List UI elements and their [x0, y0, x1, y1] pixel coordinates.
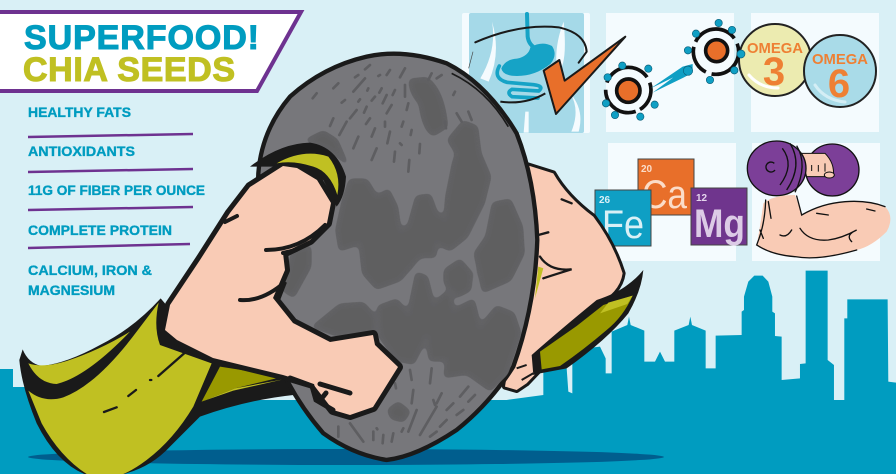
icon: omega 3 bubble: OMEGA — [747, 40, 803, 57]
seed speckles — [313, 65, 475, 443]
panel: antioxidants — [602, 13, 745, 132]
icon: iron tile: Fe — [602, 203, 644, 247]
title banner: SUPERFOOD! — [24, 19, 259, 57]
cape: left — [19, 298, 293, 474]
city skyline — [0, 271, 896, 474]
icon: magnesium tile: Mg — [694, 202, 745, 246]
panel: omega fatty acids — [739, 13, 879, 132]
icon: calcium tile: 20 — [641, 164, 653, 175]
glove band — [277, 154, 338, 195]
benefits list — [28, 105, 205, 298]
icon: calcium tile — [638, 159, 694, 217]
benefits list: HEALTHY FATS — [28, 105, 131, 120]
icon: flexed arm with dumbbell — [747, 141, 890, 258]
icon: iron tile — [595, 190, 651, 247]
icon: omega 6 bubble: OMEGA — [812, 51, 868, 68]
icon: magnesium tile: 12 — [696, 193, 708, 204]
icon: magnesium tile — [691, 188, 747, 246]
icon: omega 6 bubble: 6 — [828, 62, 850, 106]
title banner: CHIA SEEDS — [23, 51, 235, 89]
icon: stomach and intestines — [497, 14, 555, 98]
left arm and fist — [165, 143, 398, 415]
fingers — [290, 378, 350, 410]
benefits list: COMPLETE PROTEIN — [28, 223, 172, 238]
icon: orange check mark — [469, 27, 625, 114]
icon: omega 3 bubble — [739, 24, 811, 96]
icon: iron tile: 26 — [599, 195, 611, 206]
cape: right — [532, 270, 643, 375]
chia seed boulder — [258, 54, 537, 460]
icon: omega 3 bubble: 3 — [763, 50, 785, 94]
panel: minerals — [595, 143, 747, 261]
icon: omega 6 bubble — [804, 35, 876, 107]
glove cuff — [250, 143, 346, 207]
right arm and hand — [505, 165, 623, 390]
panel: digestion — [462, 13, 625, 133]
benefits list: 11G OF FIBER PER OUNCE — [28, 183, 205, 198]
benefits list: ANTIOXIDANTS — [28, 144, 135, 159]
title banner — [0, 12, 301, 91]
panel: strength — [747, 141, 890, 261]
arm shape — [165, 166, 398, 415]
benefits list: CALCIUM, IRON & — [28, 263, 152, 278]
icon: free radicals — [602, 19, 745, 120]
icon: calcium tile: Ca — [642, 173, 688, 217]
ground shadow — [28, 449, 664, 465]
benefits list: MAGNESIUM — [28, 283, 115, 298]
dark patches — [283, 78, 523, 421]
